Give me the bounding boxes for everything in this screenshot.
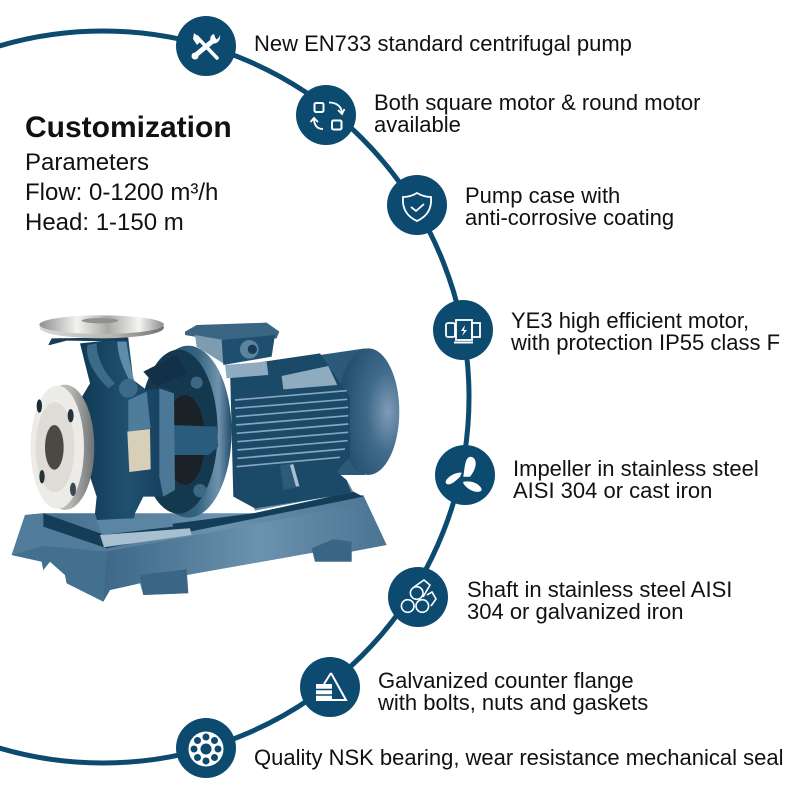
- parameters text block: Parameters: [25, 149, 149, 176]
- volute casing: [80, 338, 175, 535]
- terminal box: [185, 323, 279, 378]
- feature icon 5: impeller fan: [435, 445, 495, 505]
- bell housing flange: [139, 346, 232, 518]
- feature icon 6: shafts: [388, 567, 448, 627]
- pump photo illustration: [12, 315, 399, 602]
- feature text 3: Pump case with: [465, 183, 620, 208]
- feature text 7: Galvanized counter flange: [378, 668, 634, 693]
- feature text 7: with bolts, nuts and gaskets: [378, 690, 648, 715]
- nameplate: [127, 429, 151, 472]
- feature icon 1: tools: [176, 16, 236, 76]
- feature text 8: Quality NSK bearing, wear resistance mechanical seal: [254, 745, 783, 770]
- feature text 5: Impeller in stainless steel: [513, 456, 759, 481]
- feature text 4: YE3 high efficient motor,: [511, 308, 749, 333]
- feature text 1: New EN733 standard centrifugal pump: [254, 31, 632, 56]
- feature text 4: with protection IP55 class F: [511, 330, 780, 355]
- feature text 3: [465, 183, 674, 230]
- feature icon 8: bearing: [176, 718, 236, 778]
- feature icon 2: swap squares: [296, 85, 356, 145]
- front steel flange: [31, 385, 94, 510]
- feature icon 7: flange stack: [300, 657, 360, 717]
- parameters text block: Flow: 0-1200 m³/h: [25, 179, 218, 206]
- feature icon 3: shield: [387, 175, 447, 235]
- feature text 2: available: [374, 112, 461, 137]
- top steel flange: [39, 315, 164, 345]
- parameters text block: [25, 149, 218, 236]
- feature text 2: [374, 90, 700, 137]
- motor fan cap: [320, 348, 399, 475]
- feature text 6: 304 or galvanized iron: [467, 599, 683, 624]
- feature icon 4: motor: [433, 300, 493, 360]
- feature text 6: Shaft in stainless steel AISI: [467, 577, 732, 602]
- feature text 4: [511, 308, 780, 355]
- feature text 5: AISI 304 or cast iron: [513, 478, 712, 503]
- pump base: [12, 480, 387, 602]
- parameters text block: Head: 1-150 m: [25, 209, 184, 236]
- motor finned body: [230, 353, 352, 508]
- heading: Customization: Customization: [25, 111, 232, 144]
- arc connecting feature icons: [0, 31, 469, 763]
- feature text 6: [467, 577, 732, 624]
- feature text 5: [513, 456, 759, 503]
- feature text 3: anti-corrosive coating: [465, 205, 674, 230]
- feature text 7: [378, 668, 648, 715]
- feature text 2: Both square motor & round motor: [374, 90, 700, 115]
